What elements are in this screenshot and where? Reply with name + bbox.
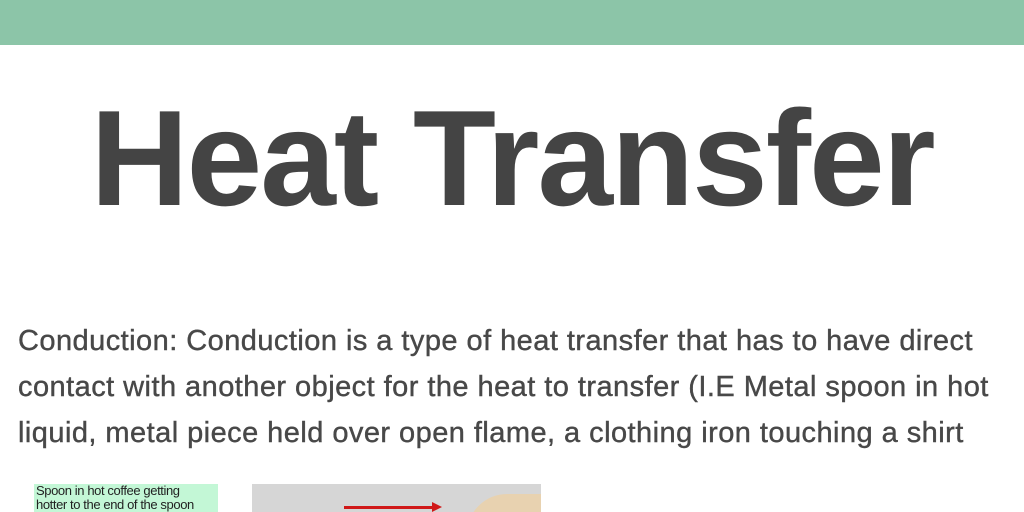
title: Heat Transfer — [90, 82, 934, 234]
image: conduction illustration — [252, 484, 541, 512]
text block: conduction: contact with another object for the heat to transfer (I.E Metal spoon in hot — [18, 371, 989, 403]
caption: spoon: hotter to the end of the spoon — [36, 497, 194, 512]
caption: spoon — [34, 484, 218, 512]
text block: conduction — [18, 325, 989, 449]
text block: conduction: Conduction: Conduction is a type of heat transfer that has to have direct — [18, 325, 973, 357]
header bar — [0, 0, 1024, 45]
text block: conduction: liquid, metal piece held over open flame, a clothing iron touching a shirt — [18, 417, 964, 449]
